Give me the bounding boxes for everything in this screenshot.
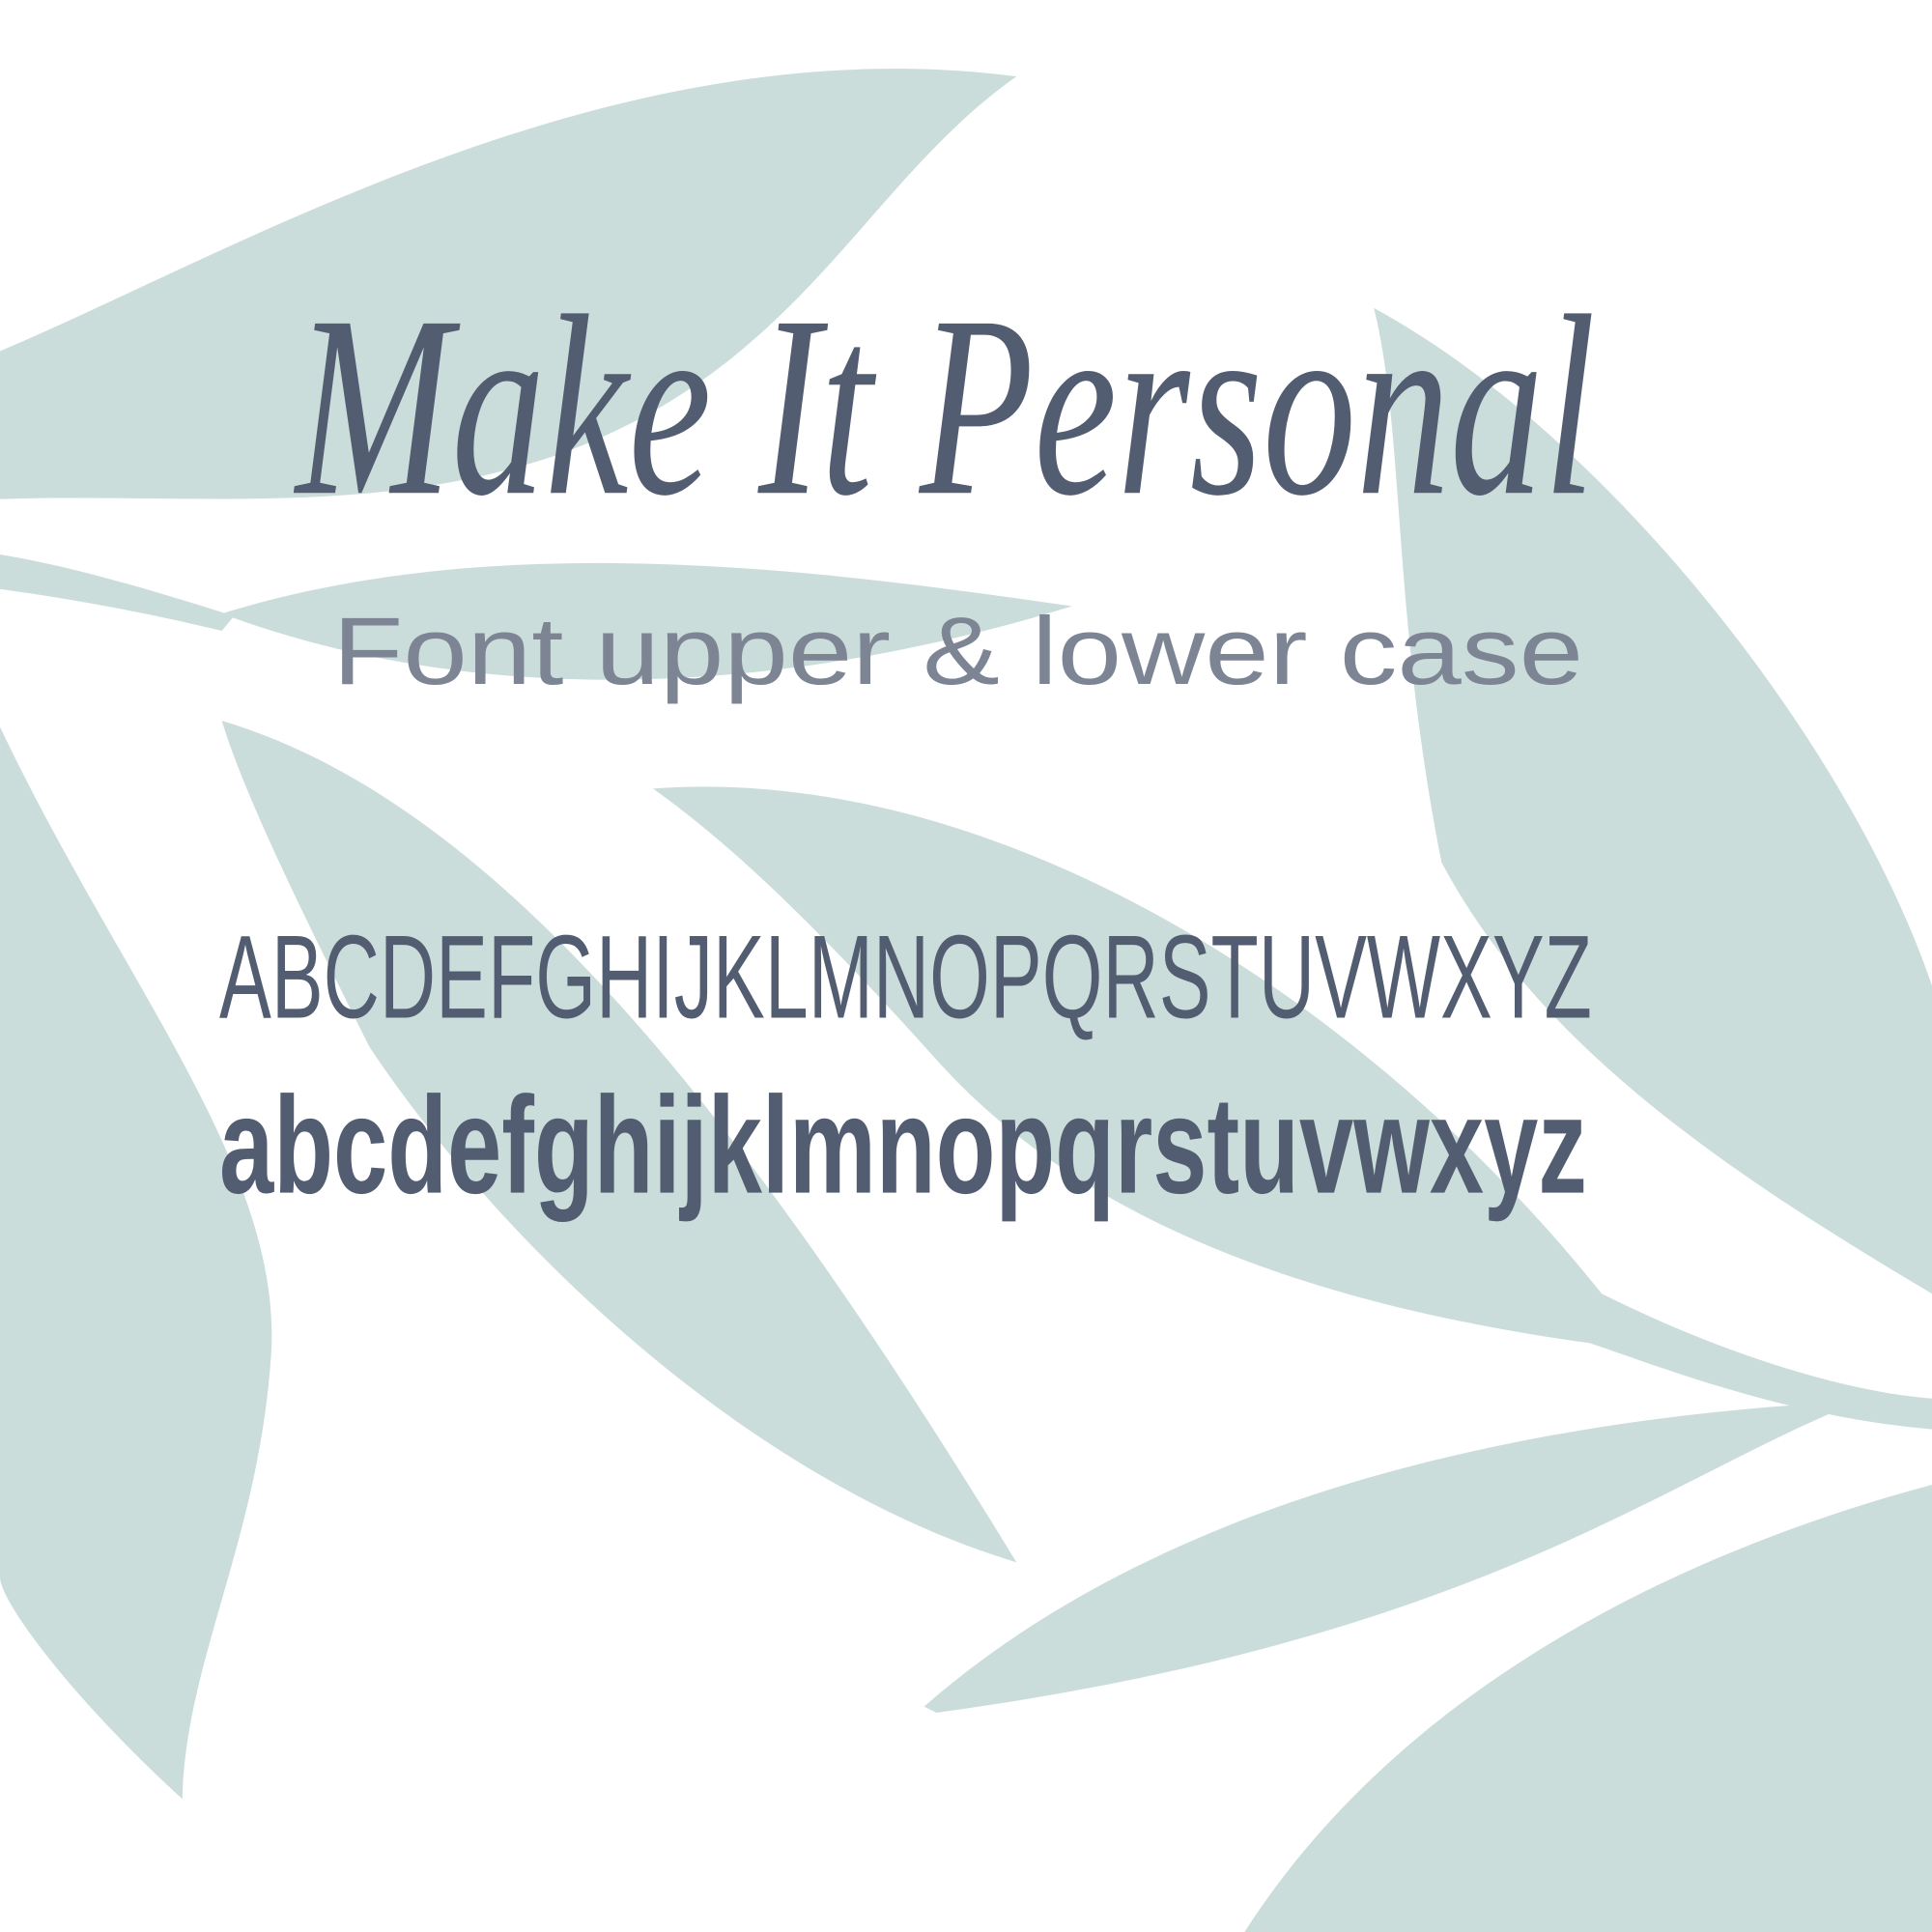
subtitle: Font upper & lower case — [332, 598, 1583, 705]
